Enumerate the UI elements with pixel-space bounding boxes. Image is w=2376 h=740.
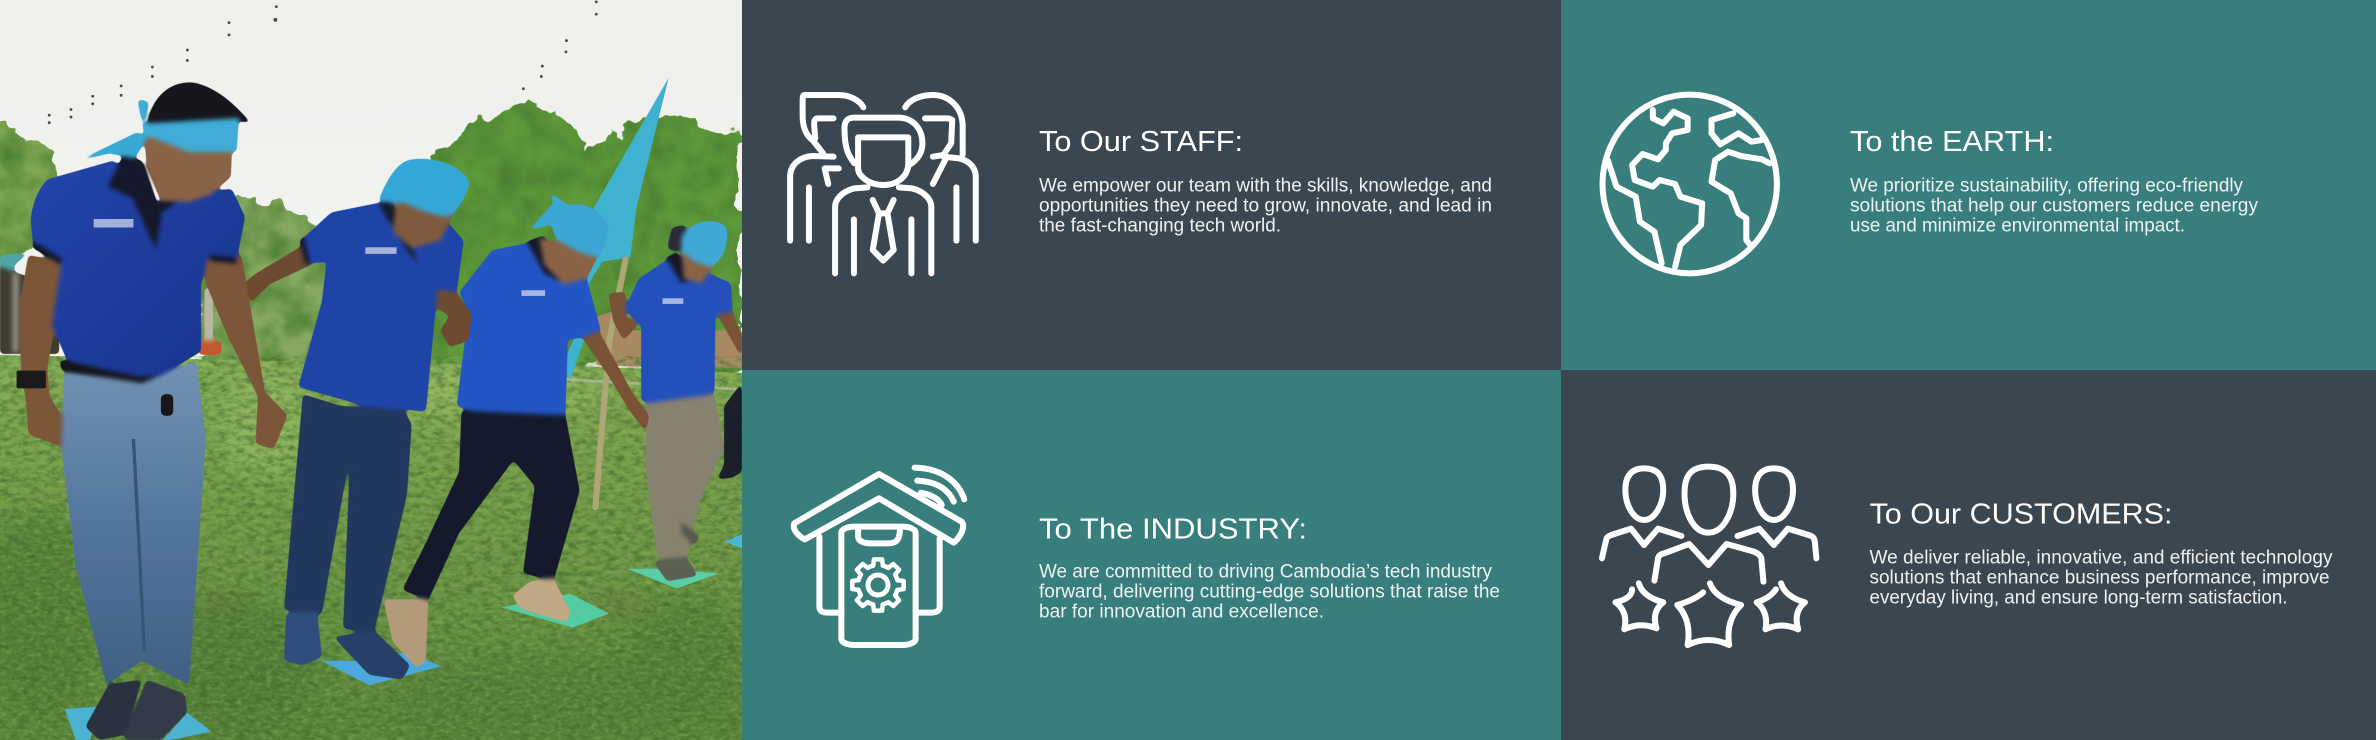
- text: customers description: [1870, 548, 2333, 609]
- text: industry description: [1039, 562, 1500, 623]
- panel: customers: [1561, 370, 2376, 740]
- icon: globe: [1602, 95, 1777, 273]
- text: earth description: [1850, 176, 2258, 237]
- bunting strings in the sky: [48, 0, 598, 124]
- flag and bamboo pole: [563, 78, 669, 507]
- text: staff description: opportunities they need to grow, innovate, and lead in: [1039, 196, 1492, 217]
- text: earth description: We prioritize sustainability, offering eco-friendly: [1850, 176, 2243, 197]
- person 4: [608, 221, 742, 581]
- panel: industry: [742, 370, 1561, 740]
- panel: staff: [742, 0, 1561, 370]
- photo: team-building activity on the lawn: [0, 0, 748, 740]
- person 3: [383, 191, 649, 668]
- heading: customers: To Our CUSTOMERS:: [1870, 499, 2172, 531]
- text: staff description: [1039, 176, 1492, 237]
- text: staff description: We empower our team with the skills, knowledge, and: [1039, 176, 1492, 197]
- icon: staff team with tie: [790, 95, 976, 273]
- person far right legs: [718, 386, 742, 479]
- foam mats: [65, 534, 742, 740]
- heading: staff: To Our STAFF:: [1039, 126, 1243, 158]
- text: customers description: everyday living, and ensure long-term satisfaction.: [1870, 588, 2288, 609]
- background trees: [0, 106, 742, 368]
- text: earth description: solutions that help our customers reduce energy: [1850, 196, 2258, 217]
- person 2: [244, 159, 472, 680]
- lawn: [0, 355, 742, 740]
- panel: earth: [1561, 0, 2376, 370]
- text: industry description: We are committed to driving Cambodia’s tech industry: [1039, 562, 1492, 583]
- heading: industry: To The INDUSTRY:: [1039, 513, 1307, 545]
- text: earth description: use and minimize environmental impact.: [1850, 216, 2185, 237]
- text: industry description: forward, delivering cutting-edge solutions that raise the: [1039, 582, 1500, 603]
- background buildings: [0, 253, 742, 368]
- text: industry description: bar for innovation and excellence.: [1039, 602, 1324, 623]
- icon: smart home phone with gear and wifi: [794, 468, 964, 645]
- bare soil patches: [607, 596, 634, 618]
- heading: earth: To the EARTH:: [1850, 126, 2054, 158]
- text: customers description: We deliver reliable, innovative, and efficient technology: [1870, 548, 2333, 569]
- icon: customers with stars: [1602, 467, 1816, 645]
- text: customers description: solutions that enhance business performance, improve: [1870, 568, 2330, 589]
- icon: gear: [852, 559, 904, 611]
- person 1: [17, 82, 288, 740]
- text: staff description: the fast-changing tech world.: [1039, 216, 1281, 237]
